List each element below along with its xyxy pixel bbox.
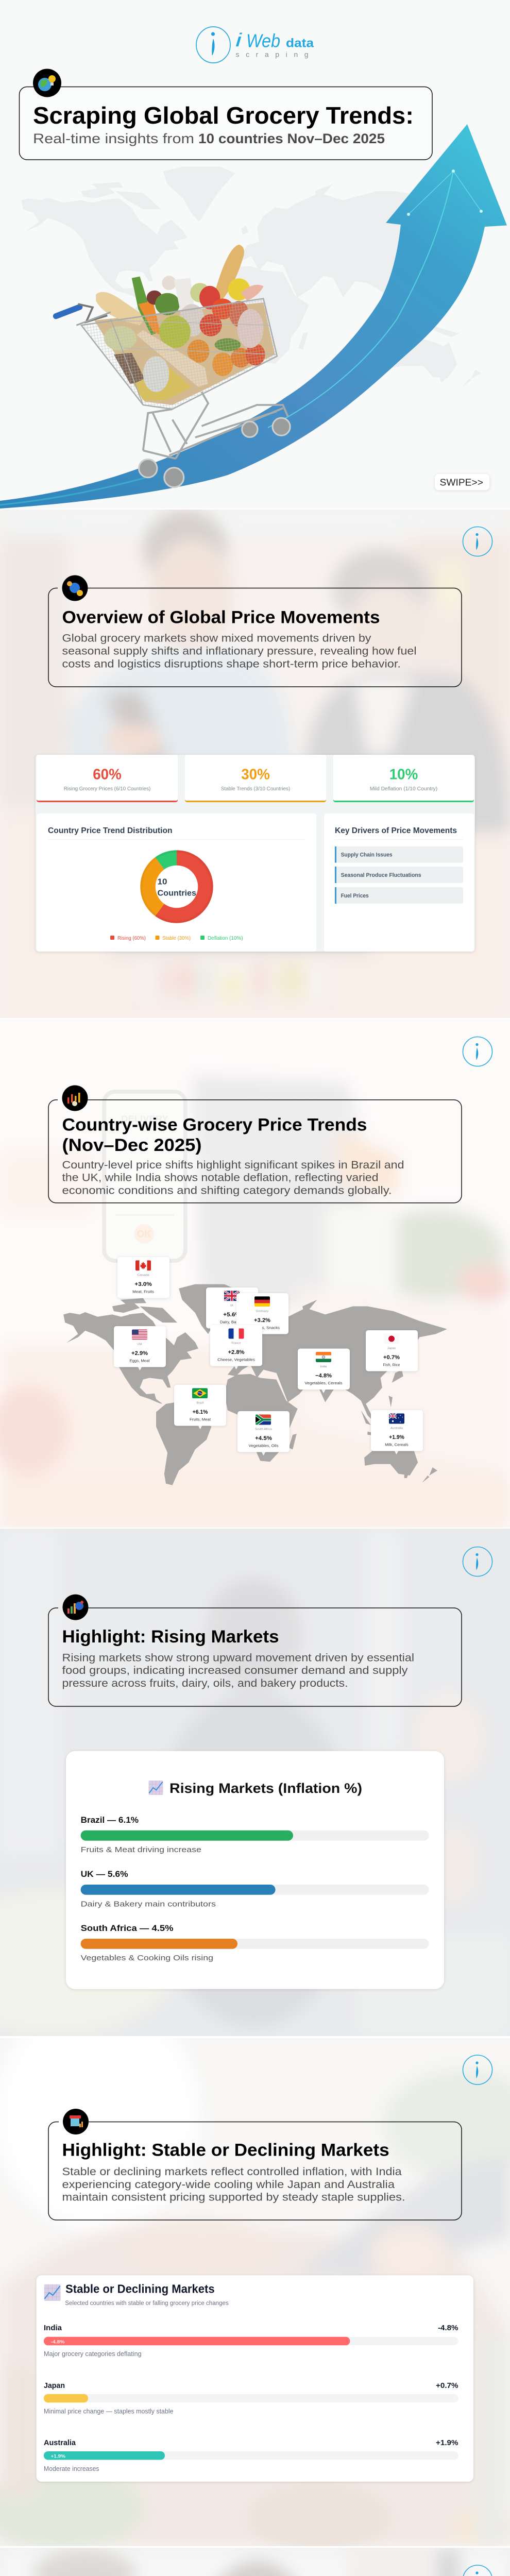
icon: price chart — [62, 1085, 88, 1111]
phone in photo — [104, 1092, 185, 1261]
bar: Japan — [44, 2382, 458, 2415]
stat card rising: Rising Grocery Prices (6/10 Countries) — [64, 786, 150, 792]
card: France: Cheese, Vegetables — [217, 1357, 255, 1362]
card: USA: Eggs, Meat — [130, 1358, 150, 1363]
bar: Australia: +1.9% — [436, 2439, 458, 2447]
bar: Brazil: Fruits & Meat driving increase — [81, 1845, 201, 1854]
description: Rising markets show strong upward movement driven by essential — [62, 1651, 414, 1664]
background photo — [0, 1998, 510, 2554]
logo: Web — [246, 30, 280, 52]
bar: UK: Dairy & Bakery main contributors — [81, 1900, 216, 1908]
heading box — [48, 2109, 462, 2220]
card: Germany: Beverages, Snacks — [245, 1325, 280, 1330]
card: Canada — [117, 1257, 169, 1298]
panel: intro cover — [0, 0, 510, 509]
card: USA: USA — [137, 1343, 142, 1346]
stat card rising: 60% — [93, 767, 122, 783]
heading box — [48, 1595, 462, 1706]
bar: India: India — [44, 2324, 62, 2332]
shopping cart with groceries — [56, 245, 290, 487]
stable markets chart card — [37, 2275, 473, 2482]
bar: Japan: Japan — [44, 2382, 65, 2390]
card: Germany — [236, 1293, 288, 1334]
stat card rising — [37, 755, 178, 802]
bar: Australia: +1.9% — [50, 2454, 66, 2460]
heading box: Overview of Global Price Movements — [62, 608, 380, 628]
card: South Africa — [237, 1411, 290, 1455]
bar: Brazil — [81, 1815, 429, 1854]
description: Stable or declining markets reflect controlled inflation, with India — [62, 2165, 402, 2178]
card: UK: +5.6% — [223, 1312, 241, 1318]
heading box: (Nov–Dec 2025) — [62, 1136, 202, 1155]
card: India: −4.8% — [315, 1373, 332, 1379]
card: Australia: Australia — [390, 1427, 403, 1430]
logo — [196, 27, 314, 63]
heading box: Highlight: Rising Markets — [62, 1627, 279, 1647]
panel: overview — [0, 510, 510, 1021]
panel: price trend — [0, 2548, 510, 2576]
description: maintain consistent pricing supported by steady staple supplies. — [62, 2191, 405, 2204]
title box: Scraping Global Grocery Trends: — [33, 102, 414, 129]
bar: Japan: +0.7% — [436, 2382, 458, 2390]
card: Canada: Meat, Fruits — [132, 1289, 154, 1294]
description: Global grocery markets show mixed movements driven by — [62, 632, 371, 645]
card: South Africa: South Africa — [255, 1428, 273, 1431]
logo: data — [286, 36, 314, 50]
icon: globe with price tags — [62, 575, 88, 601]
donut chart card: Country Price Trend Distribution — [48, 826, 173, 835]
description: seasonal supply shifts and inflationary pressure, revealing how fuel — [62, 645, 416, 657]
card: Japan: Japan — [387, 1347, 396, 1350]
card: Brazil: Fruits, Meat — [190, 1417, 211, 1421]
description — [62, 2165, 405, 2204]
growth arrow — [0, 124, 507, 509]
bar: UK — [81, 1869, 429, 1908]
card: UK: UK — [230, 1304, 233, 1308]
bar: Australia: Moderate increases — [44, 2465, 99, 2472]
brand mark — [463, 1547, 492, 1577]
card: South Africa: Vegetables, Oils — [248, 1443, 279, 1448]
card: Brazil: +6.1% — [193, 1409, 208, 1415]
description — [62, 632, 416, 670]
card: Brazil — [174, 1385, 226, 1429]
card: Germany: Germany — [256, 1310, 269, 1313]
stat card stable: Stable Trends (3/10 Countries) — [221, 786, 290, 792]
stat card stable — [185, 755, 326, 802]
logo: i — [235, 29, 242, 50]
stat card deflation: 10% — [389, 767, 418, 783]
title box: 10 countries Nov–Dec 2025 — [198, 131, 385, 146]
brand mark — [463, 1037, 492, 1066]
bar: India: -4.8% — [438, 2324, 458, 2332]
bar: South Africa: Vegetables & Cooking Oils rising — [81, 1954, 213, 1962]
phone in photo: DELIVERY — [121, 1114, 168, 1124]
card: India: India — [320, 1365, 327, 1368]
legend: Rising (60%) — [117, 935, 146, 941]
heading box: Country-wise Grocery Price Trends — [62, 1115, 367, 1135]
description — [62, 1159, 404, 1196]
bar: Japan: Minimal price change — staples mostly stable — [44, 2408, 174, 2415]
background photo — [0, 2550, 510, 2576]
stable markets chart card: Selected countries with stable or falling grocery price changes — [65, 2300, 229, 2307]
basket wire frame — [81, 299, 277, 409]
card: UK: Dairy, Bakery — [220, 1319, 244, 1324]
key drivers card: Fuel Prices — [341, 893, 369, 899]
bar: Brazil: Brazil — 6.1% — [81, 1815, 139, 1825]
heading box — [48, 1085, 462, 1203]
icon: store with chart — [63, 2109, 89, 2134]
handle — [56, 304, 111, 325]
brand mark — [463, 2055, 492, 2084]
card: Canada: +3.0% — [134, 1281, 152, 1287]
donut — [137, 846, 217, 927]
bar: South Africa — [81, 1923, 429, 1962]
card: Canada: Canada — [137, 1274, 150, 1277]
legend: Deflation (10%) — [208, 935, 243, 941]
background photo — [0, 510, 510, 1021]
card: Japan: Fish, Rice — [383, 1362, 400, 1367]
card: Japan: +0.7% — [383, 1354, 400, 1361]
title box: Real-time insights from — [33, 131, 194, 146]
card: Brazil: Brazil — [197, 1402, 203, 1405]
description: food groups, indicating increased consumer demand and supply — [62, 1664, 408, 1676]
bar: South Africa: South Africa — 4.5% — [81, 1923, 174, 1933]
bar: UK: UK — 5.6% — [81, 1869, 128, 1879]
heading box: Highlight: Stable or Declining Markets — [62, 2141, 389, 2160]
donut chart card — [37, 814, 316, 952]
card: India — [298, 1349, 350, 1393]
heading box — [48, 575, 462, 687]
card: Australia: Milk, Cereals — [385, 1442, 409, 1447]
card: UK — [206, 1287, 258, 1328]
key drivers card: Key Drivers of Price Movements — [335, 826, 457, 835]
world map background — [21, 166, 493, 389]
panel: stable or declining — [0, 1998, 510, 2554]
card: France — [210, 1325, 262, 1369]
bar: Australia — [44, 2439, 458, 2472]
key drivers card: Seasonal Produce Fluctuations — [341, 872, 421, 878]
chassis — [143, 392, 288, 459]
icon: globe and bulb — [33, 69, 61, 97]
legend: Stable (30%) — [162, 935, 191, 941]
description: experiencing category-wide cooling while Japan and Australia — [62, 2178, 395, 2191]
title box — [20, 69, 432, 160]
food above basket — [94, 245, 275, 405]
panel: country-wise — [0, 1019, 510, 1531]
card: Australia: +1.9% — [389, 1434, 404, 1440]
card: Germany: +3.2% — [254, 1317, 270, 1324]
description: costs and logistics disruptions shape short-term price behavior. — [62, 657, 401, 670]
stat card deflation: Mild Deflation (1/10 Country) — [370, 786, 437, 792]
stable markets chart card: Stable or Declining Markets — [65, 2282, 215, 2296]
donut chart card: Countries — [158, 889, 196, 898]
card: France: France — [231, 1342, 241, 1345]
rising markets chart card: Rising Markets (Inflation %) — [169, 1781, 362, 1796]
world map — [63, 1284, 447, 1485]
card: USA: +2.9% — [131, 1350, 148, 1357]
description: pressure across fruits, dairy, oils, and bakery products. — [62, 1677, 348, 1689]
card: Australia — [371, 1410, 423, 1454]
description: economic conditions and shifting category demands globally. — [62, 1184, 392, 1196]
rising markets chart card — [66, 1751, 444, 1989]
bar: Australia: Australia — [44, 2439, 76, 2447]
bar: India — [44, 2324, 458, 2358]
description — [62, 1651, 414, 1689]
stat card deflation — [333, 755, 474, 802]
legend — [110, 935, 243, 941]
brand mark — [463, 527, 492, 556]
brand mark — [463, 2565, 492, 2576]
donut chart card: 10 — [158, 878, 167, 887]
key drivers card: Supply Chain Issues — [341, 852, 393, 858]
key drivers card — [324, 814, 474, 952]
description: Country-level price shifts highlight significant spikes in Brazil and — [62, 1159, 404, 1171]
card: USA — [114, 1326, 166, 1370]
swipe button — [435, 474, 489, 490]
bar: India: Major grocery categories deflating — [44, 2350, 142, 2358]
description: the UK, while India shows notable deflation, reflecting varied — [62, 1172, 378, 1184]
panel: rising markets — [0, 1529, 510, 2036]
bar: India: -4.8% — [50, 2339, 65, 2345]
card: Japan — [366, 1330, 418, 1375]
swipe button: SWIPE>> — [440, 477, 483, 487]
card: France: +2.8% — [228, 1349, 245, 1355]
card: South Africa: +4.5% — [255, 1435, 272, 1442]
stat card stable: 30% — [241, 767, 270, 783]
background photo — [0, 1530, 510, 2035]
logo: scraping — [236, 50, 308, 59]
background photo — [0, 1075, 510, 1531]
phone in photo: OK — [137, 1229, 151, 1240]
icon: rising bars with globe — [63, 1595, 89, 1620]
dashboard — [36, 755, 475, 952]
wheels — [139, 418, 290, 487]
card: India: Vegetables, Cereals — [304, 1381, 343, 1385]
